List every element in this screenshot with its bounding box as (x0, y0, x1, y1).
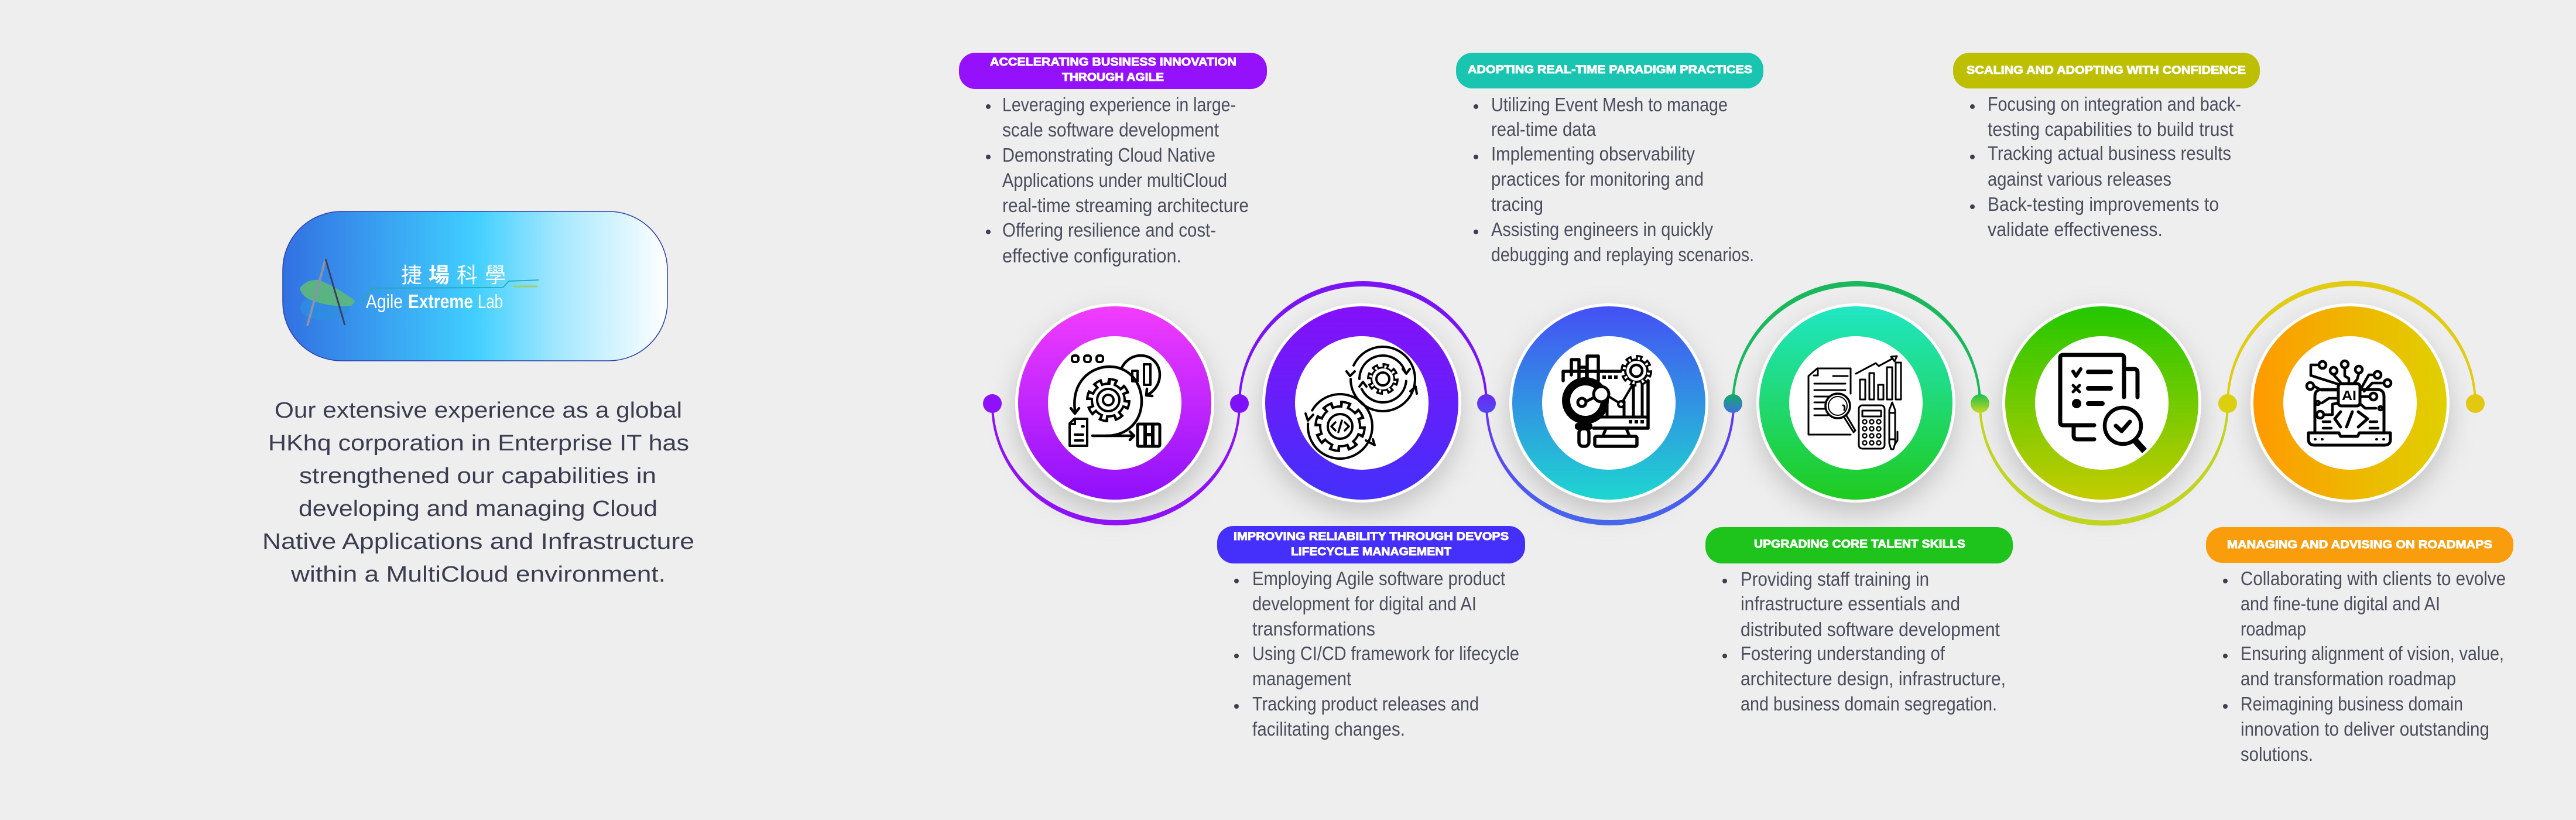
heading pill: THROUGH AGILE (1062, 71, 1164, 84)
bullet list: Utilizing Event Mesh to manage (1491, 94, 1728, 115)
panel 5: scaling with confidence (1953, 53, 2260, 240)
bullet list: real-time data (1491, 118, 1597, 140)
logo Chinese name (401, 258, 506, 289)
bullet list: Demonstrating Cloud Native (1002, 144, 1215, 166)
circle 1: agile (1015, 303, 1214, 513)
icon: checklist with magnifier (2060, 355, 2145, 451)
panel: company intro (262, 211, 694, 587)
icon: gear process (1070, 356, 1160, 446)
bullet list: Employing Agile software product (1252, 568, 1505, 589)
bullet list: development for digital and AI (1252, 593, 1477, 614)
circle 3: real-time (1509, 303, 1708, 513)
bullet list: Focusing on integration and back- (1988, 93, 2241, 115)
panel 3: real-time paradigm (1456, 53, 1763, 265)
heading pill: MANAGING AND ADVISING ON ROADMAPS (2227, 539, 2492, 551)
icon: observability monitor (1563, 356, 1649, 446)
bullet list: Back-testing improvements to (1988, 193, 2219, 215)
bullet list: Collaborating with clients to evolve (2241, 568, 2506, 589)
bullet list: transformations (1252, 618, 1375, 640)
bullet list (1722, 568, 2006, 715)
intro paragraph: HKhq corporation in Enterprise IT has (268, 431, 689, 456)
panel 6: roadmaps (2206, 527, 2513, 765)
heading pill: LIFECYCLE MANAGEMENT (1291, 546, 1451, 558)
logo card (283, 211, 667, 361)
heading pill: ADOPTING REAL-TIME PARADIGM PRACTICES (1468, 64, 1752, 76)
bullet list: Offering resilience and cost- (1002, 219, 1216, 241)
bullet list (1474, 94, 1754, 265)
bullet list: testing capabilities to build trust (1988, 118, 2234, 140)
bullet list: and business domain segregation. (1741, 693, 1997, 715)
heading pill (1456, 53, 1763, 88)
bullet list: Providing staff training in (1741, 568, 1929, 590)
bullet list: Ensuring alignment of vision, value, (2241, 643, 2504, 664)
heading pill (1705, 527, 2013, 563)
bullet list: innovation to deliver outstanding (2241, 718, 2489, 740)
gear (1623, 358, 1649, 384)
bullet list: roadmap (2241, 618, 2306, 640)
intro paragraph: Native Applications and Infrastructure (262, 529, 694, 554)
intro paragraph: Our extensive experience as a global (275, 398, 682, 423)
logo Chinese name: 場 (429, 258, 450, 289)
bullet list: scale software development (1002, 119, 1219, 141)
logo Chinese name: 捷 (401, 258, 422, 289)
bullet list (1234, 568, 1519, 740)
bullet list: Using CI/CD framework for lifecycle (1252, 643, 1519, 664)
upper gear (1370, 365, 1396, 392)
circle 6: roadmap (2250, 303, 2450, 513)
intro paragraph (262, 398, 694, 587)
bullet list: debugging and replaying scenarios. (1491, 244, 1754, 265)
intro paragraph: developing and managing Cloud (299, 497, 657, 521)
bullet list: Tracking actual business results (1988, 142, 2231, 164)
heading pill (1953, 53, 2260, 88)
bullet list: effective configuration. (1002, 245, 1181, 266)
logo English name: Agile (366, 291, 403, 312)
bullet list: practices for monitoring and (1491, 168, 1704, 190)
intro paragraph: within a MultiCloud environment. (290, 562, 666, 587)
bullet list (986, 94, 1249, 266)
bullet list: Leveraging experience in large- (1002, 94, 1236, 115)
lower gear (1318, 405, 1362, 448)
heading pill (1217, 526, 1525, 563)
heading pill: ACCELERATING BUSINESS INNOVATION (990, 56, 1236, 69)
bullet list: real-time streaming architecture (1002, 194, 1249, 216)
logo English name: Extreme (408, 291, 473, 312)
panel 2: improving reliability (1217, 526, 1525, 740)
bullet list: infrastructure essentials and (1741, 593, 1960, 614)
logo English name: Lab (478, 291, 503, 312)
bullet list: Implementing observability (1491, 143, 1695, 165)
heading pill: UPGRADING CORE TALENT SKILLS (1754, 538, 1965, 551)
circle 5: scaling (2002, 303, 2201, 513)
bullet list: and fine-tune digital and AI (2241, 593, 2440, 614)
gear (1090, 382, 1126, 418)
bullet list: Tracking product releases and (1252, 693, 1479, 715)
bullet list: Reimagining business domain (2241, 693, 2463, 715)
heading pill: SCALING AND ADOPTING WITH CONFIDENCE (1967, 64, 2246, 77)
logo Chinese name: 科 (457, 258, 478, 289)
logo English name (366, 291, 503, 312)
bullet list (2223, 568, 2506, 765)
bullet list: against various releases (1988, 168, 2171, 190)
bullet list: architecture design, infrastructure, (1741, 668, 2006, 689)
bullet list (1970, 93, 2241, 240)
bullet list: Applications under multiCloud (1002, 169, 1227, 191)
bullet list: validate effectiveness. (1988, 218, 2163, 240)
heading pill (2206, 527, 2513, 563)
heading pill: IMPROVING RELIABILITY THROUGH DEVOPS (1234, 531, 1509, 543)
icon: two gears with cycles (1296, 336, 1426, 470)
logo Chinese name: 學 (485, 258, 506, 289)
circle 4: talent (1756, 303, 1955, 513)
bullet list: solutions. (2241, 743, 2313, 765)
bullet list: tracing (1491, 193, 1543, 215)
bullet list: distributed software development (1741, 619, 2000, 640)
panel 1: accelerating innovation (959, 53, 1267, 266)
bullet list: and transformation roadmap (2241, 668, 2456, 689)
bullet list: facilitating changes. (1252, 718, 1405, 740)
icon: AI chip laptop: AI (2342, 388, 2356, 403)
magnifier (1566, 381, 1609, 446)
heading pill (959, 53, 1267, 89)
bullet list: management (1252, 668, 1351, 689)
icon: grasshopper logo mark (300, 259, 539, 326)
wave connector arcs and nodes (983, 281, 2485, 525)
bullet list: Fostering understanding of (1741, 643, 1945, 664)
intro paragraph: strengthened our capabilities in (299, 464, 656, 488)
icon: AI chip laptop (2307, 361, 2391, 445)
icon: report and calculator (1808, 356, 1901, 449)
bullet list: Assisting engineers in quickly (1491, 218, 1713, 240)
circle 2: devops (1262, 303, 1461, 513)
panel 4: core talent (1705, 527, 2013, 715)
